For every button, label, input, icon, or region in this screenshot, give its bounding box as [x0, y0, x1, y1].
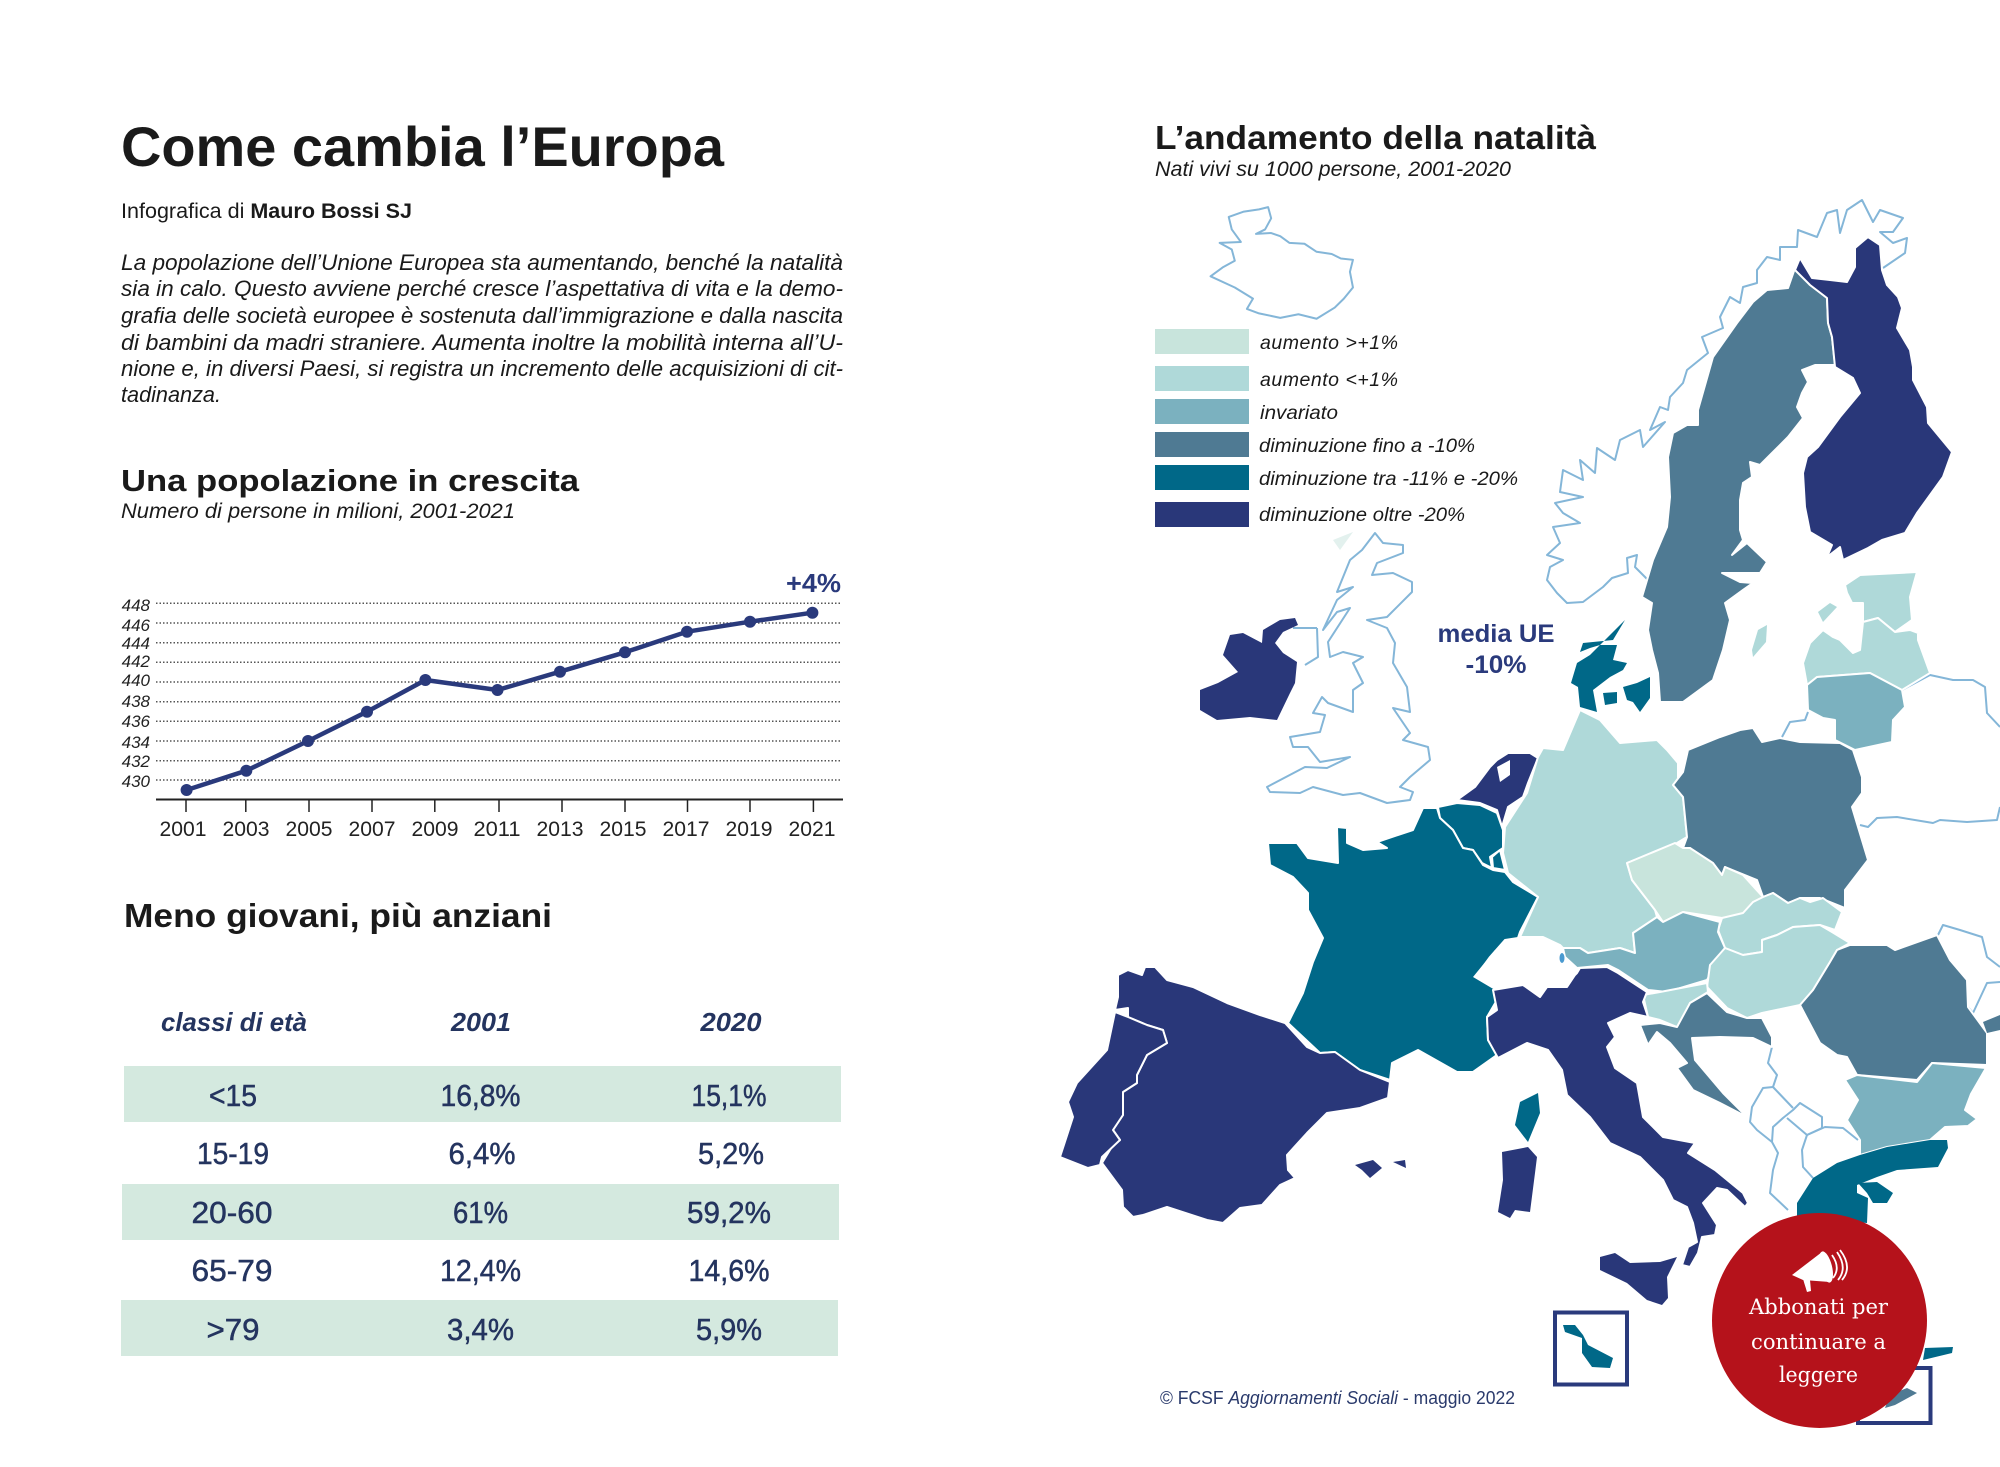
heading: birth rate map: L’andamento della natalità [1155, 119, 1597, 156]
map of Europe [1060, 200, 2000, 1408]
line chart: population 2001-2021: 2007 [348, 818, 396, 841]
non-EU outlines: eastern borders [1293, 628, 2000, 1013]
line chart: population 2001-2021: 444 [122, 634, 150, 653]
country: Belgium [1438, 803, 1503, 868]
lake [1560, 953, 1564, 963]
subheading: birth rate map: Nati vivi su 1000 persone, 2001-2020 [1155, 158, 1511, 181]
subscribe badge: Abbonati per [1748, 1295, 1889, 1319]
EU average callout [1438, 620, 1554, 679]
legend: diminuzione fino a -10% [1259, 435, 1475, 457]
island: Malta [1563, 1325, 1613, 1368]
legend: aumento <+1% [1260, 369, 1398, 391]
non-EU outline: United Kingdom [1267, 533, 1430, 803]
age class table: 59,2% [687, 1195, 771, 1230]
line chart: population 2001-2021: 440 [122, 671, 151, 690]
age class table: 2001 [450, 1007, 511, 1037]
age class table: 15,1% [692, 1078, 766, 1113]
line chart: population 2001-2021: 2009 [412, 818, 458, 841]
age class table: 61% [453, 1195, 508, 1230]
country: Austria [1563, 912, 1725, 992]
age class table: 2020 [699, 1007, 762, 1037]
country: Ireland [1200, 618, 1298, 720]
line chart: population 2001-2021: 434 [122, 733, 150, 752]
country: France [1268, 808, 1538, 1080]
country: Latvia [1803, 618, 1930, 690]
Cyprus inset box [1858, 1368, 1930, 1423]
age class table: 14,6% [688, 1253, 770, 1288]
non-EU outline: Norway [1547, 200, 1907, 603]
country: Hungary [1707, 925, 1850, 1018]
legend: aumento >+1% [1260, 332, 1398, 354]
intro paragraph: grafia delle società europee è sostenuta dall’immigrazione e dalla nascita [121, 303, 843, 328]
age class table: 5,2% [698, 1136, 764, 1171]
country: Estonia [1845, 572, 1917, 632]
line chart: population 2001-2021: 2011 [474, 818, 520, 841]
line chart: population 2001-2021: +4% [786, 568, 841, 598]
country: Poland [1673, 728, 1868, 908]
intro paragraph: sia in calo. Questo avviene perché cresce l’aspettativa di vita e la demo- [121, 276, 843, 301]
age class table: 12,4% [440, 1253, 521, 1288]
credit line: © FCSF Aggiornamenti Sociali - maggio 2022 [1160, 1388, 1515, 1408]
line chart: population 2001-2021: 2015 [600, 818, 646, 841]
country: Slovakia [1718, 893, 1842, 955]
legend [1155, 329, 1518, 527]
intro paragraph [121, 250, 843, 407]
line chart: population 2001-2021: 430 [122, 772, 151, 791]
age class table: 65-79 [192, 1253, 272, 1288]
non-EU: Switzerland [1473, 940, 1573, 997]
non-EU outlines: Balkans [1750, 1047, 1858, 1210]
intro paragraph: tadinanza. [121, 382, 221, 407]
country: Finland [1795, 237, 1952, 560]
country: Denmark [1571, 620, 1650, 712]
country: Lithuania [1807, 673, 1905, 750]
age class table [121, 1007, 841, 1356]
country: Croatia [1640, 993, 1772, 1117]
country: Slovenia [1643, 983, 1708, 1027]
title: Come cambia l’Europa [121, 115, 725, 178]
age class table: <15 [209, 1078, 257, 1113]
line chart: population 2001-2021: 436 [122, 712, 151, 731]
intro paragraph: La popolazione dell’Unione Europea sta aumentando, benché la natalità [121, 250, 843, 275]
line chart: population 2001-2021: 2019 [726, 818, 772, 841]
line chart: population 2001-2021: 2003 [222, 818, 270, 841]
country: Romania [1800, 935, 2000, 1080]
line chart: population 2001-2021: 2017 [662, 818, 710, 841]
subheading: population: Numero di persone in milioni, 2001-2021 [121, 500, 515, 523]
legend: invariato [1260, 402, 1338, 424]
subscribe badge: continuare a [1751, 1330, 1886, 1354]
country: Czechia [1627, 843, 1763, 922]
age class table: 3,4% [447, 1312, 514, 1347]
country: Italy [1487, 967, 1748, 1305]
line chart: population 2001-2021: 2005 [286, 818, 332, 841]
subscribe badge: leggere [1779, 1363, 1858, 1387]
line chart: population 2001-2021: 438 [122, 692, 151, 711]
icon: megaphone [1792, 1250, 1847, 1292]
line chart: population 2001-2021: 2013 [536, 818, 584, 841]
country: Sweden [1642, 268, 1835, 702]
age class table: 5,9% [696, 1312, 762, 1347]
island: Cyprus [1885, 1388, 1917, 1408]
line chart: population 2001-2021: 446 [122, 616, 151, 635]
heading: population: Una popolazione in crescita [121, 463, 580, 498]
line chart: population 2001-2021 [122, 568, 843, 841]
line chart: population 2001-2021: 442 [122, 652, 151, 671]
age class table: 20-60 [192, 1195, 272, 1230]
intro paragraph: di bambini da madri straniere. Aumenta inoltre la mobilità interna all’U- [121, 330, 843, 355]
legend: diminuzione oltre -20% [1259, 504, 1465, 526]
intro paragraph: nione e, in diversi Paesi, si registra un incremento delle acquisizioni di cit- [121, 356, 843, 381]
age class table: 16,8% [440, 1078, 520, 1113]
country: Portugal [1060, 1012, 1167, 1168]
non-EU outlines: Iceland [1211, 207, 1353, 319]
age class table: classi di età [161, 1007, 307, 1037]
byline: Infografica di Mauro Bossi SJ [121, 200, 412, 223]
EU average callout: -10% [1466, 651, 1526, 679]
country: Bulgaria [1845, 1063, 1986, 1155]
age class table: 15-19 [197, 1136, 269, 1171]
country: Netherlands [1457, 753, 1538, 827]
country: Spain [1102, 967, 1406, 1223]
EU average callout: media UE [1438, 620, 1554, 648]
country: Luxembourg [1492, 850, 1505, 870]
line chart: population 2001-2021: 432 [122, 752, 151, 771]
line chart: population 2001-2021: 2021 [788, 818, 836, 841]
country: Greece [1797, 1140, 1953, 1360]
Scottish islands [1333, 532, 1353, 550]
country: Germany [1503, 710, 1687, 953]
age class table: 6,4% [448, 1136, 516, 1171]
islands: Saaremaa and Gotland [1752, 603, 1837, 657]
Malta inset box [1555, 1312, 1627, 1384]
legend: diminuzione tra -11% e -20% [1259, 468, 1518, 490]
age class table: >79 [206, 1312, 260, 1347]
line chart: population 2001-2021: 448 [122, 596, 151, 615]
island: Corsica [1515, 1093, 1540, 1142]
heading: age table: Meno giovani, più anziani [124, 897, 552, 934]
subscribe badge [1712, 1213, 1927, 1428]
line chart: population 2001-2021: 2001 [160, 818, 206, 841]
